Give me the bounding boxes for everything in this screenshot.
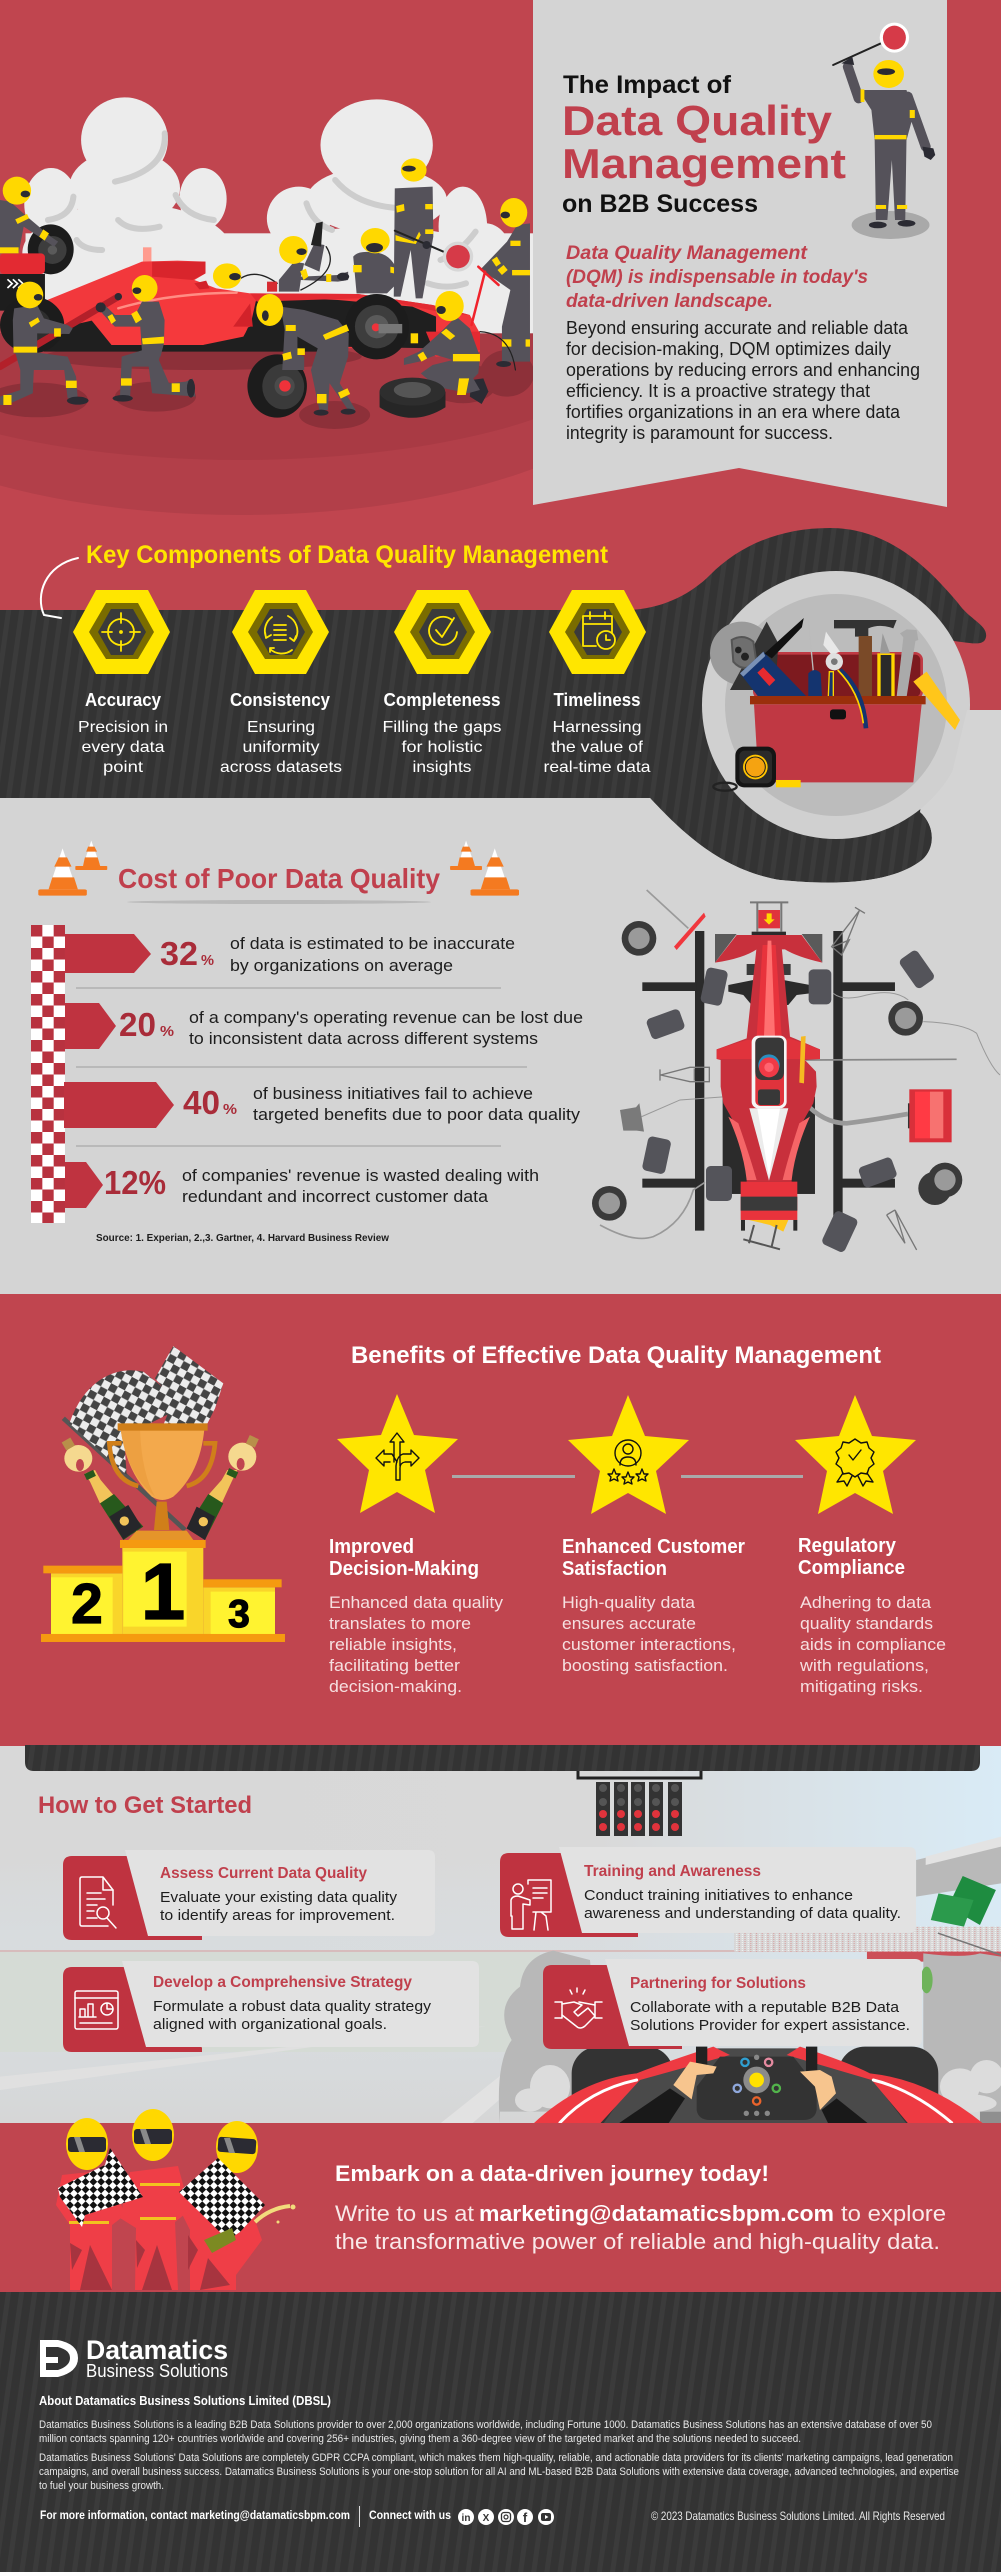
component: completeness: Filling the gaps <box>382 719 502 736</box>
crew member with tool <box>279 222 349 292</box>
call to action heading: Embark on a data-driven journey today! <box>335 2161 769 2186</box>
call to action text: the transformative power of reliable and high-quality data. <box>335 2229 940 2254</box>
about paragraphs: to fuel your business growth. <box>39 2480 164 2492</box>
benefit: decision-making: Improved <box>329 1536 414 1558</box>
intro paragraph: operations by reducing errors and enhancing <box>566 360 920 380</box>
podium numbers <box>71 1547 250 1636</box>
component: consistency: uniformity <box>242 739 320 756</box>
benefit: regulatory compliance <box>795 1395 946 1696</box>
component: completeness <box>382 590 502 776</box>
statistic 32%: of data is estimated to be inaccurate <box>230 934 515 953</box>
logo <box>40 2335 228 2381</box>
air guns and frames <box>660 907 917 1250</box>
crew member holding rear wheel <box>0 177 58 253</box>
checkered flags <box>58 2148 143 2227</box>
benefit: customer satisfaction: Enhanced Customer <box>562 1536 745 1558</box>
crew member at right with jack <box>472 198 530 367</box>
benefit: customer satisfaction: customer interactions, <box>562 1635 736 1654</box>
intro paragraph: Beyond ensuring accurate and reliable data <box>566 318 909 338</box>
crew member with lollipop sign <box>833 23 935 239</box>
component: accuracy: Precision in <box>78 719 168 736</box>
statistic 12%: 12% <box>104 1164 166 1201</box>
podium numbers: 2 <box>71 1572 103 1636</box>
card: develop a comprehensive strategy: Develop a Comprehensive Strategy <box>153 1974 412 1991</box>
statistic 32% <box>65 934 515 975</box>
trophy on podium illustration <box>41 1346 285 1642</box>
source note: Source: 1. Experian, 2.,3. Gartner, 4. Harvard Business Review <box>96 1232 390 1244</box>
card: assess current data quality: to identify areas for improvement. <box>160 1907 395 1924</box>
stacked tyre <box>380 378 445 418</box>
gray toolbox circle <box>702 571 970 839</box>
intro statement: data-driven landscape. <box>566 290 773 312</box>
smoke clouds <box>22 97 533 333</box>
icon: toolbox with tools <box>710 620 960 791</box>
component: consistency: across datasets <box>220 759 342 776</box>
starting lights <box>578 1771 701 1836</box>
component: completeness: for holistic <box>402 739 482 756</box>
rear wheel behind crew <box>28 224 74 274</box>
kneeling crew member with wrench <box>96 275 195 402</box>
benefit: decision-making: reliable insights, <box>329 1635 457 1654</box>
red wrench <box>0 297 118 367</box>
card: partnering for solutions: Solutions Provider for expert assistance. <box>630 2017 910 2034</box>
bending crew member <box>256 294 356 416</box>
title: Management <box>562 140 846 187</box>
driver arms and hands <box>618 2062 868 2124</box>
card: develop a comprehensive strategy: Formulate a robust data quality strategy <box>153 1998 432 2015</box>
icon: check circle <box>429 617 457 645</box>
statistic 12%: redundant and incorrect customer data <box>182 1187 489 1206</box>
social icons: f <box>523 2510 528 2525</box>
champagne bottle and spray <box>204 2204 296 2253</box>
statistic 32%: % <box>201 952 214 969</box>
checkered flags <box>63 1346 223 1530</box>
benefit: customer satisfaction: ensures accurate <box>562 1614 696 1633</box>
panel: title banner <box>533 0 947 507</box>
smoke <box>499 1951 1001 2124</box>
title: on B2B Success <box>562 190 758 218</box>
icon: target <box>102 613 140 651</box>
traffic cones left <box>38 841 107 896</box>
top dark bar <box>25 1745 980 1771</box>
loose wheels <box>592 921 962 1221</box>
racer helmets <box>66 2109 258 2173</box>
benefit: customer satisfaction: High-quality data <box>562 1593 696 1612</box>
benefit: regulatory compliance: aids in compliance <box>800 1635 946 1654</box>
heading: How to Get Started <box>38 1792 252 1819</box>
intro paragraph <box>566 318 920 443</box>
component: accuracy: point <box>103 759 144 776</box>
benefit: regulatory compliance: with regulations, <box>799 1656 929 1675</box>
statistic 32%: 32 <box>160 935 198 972</box>
title <box>562 71 846 218</box>
spare tyres <box>642 949 936 1253</box>
benefit: customer satisfaction: boosting satisfaction. <box>562 1656 728 1675</box>
card: partnering for solutions <box>543 1959 922 2049</box>
banner ribbon <box>533 0 947 507</box>
car tyres and suspension <box>700 964 831 1201</box>
lower gray background <box>0 710 1001 1294</box>
large tyre left <box>0 297 64 353</box>
card: training and awareness <box>500 1847 916 1937</box>
call to action text: marketing@datamaticsbpm.com <box>479 2201 834 2226</box>
icon: document with magnifier <box>80 1877 116 1928</box>
icon: cycle list <box>265 616 297 654</box>
icon: analytics dashboard <box>75 1991 118 2029</box>
heading: Key Components of Data Quality Management <box>86 541 609 569</box>
benefit: decision-making: decision-making. <box>329 1677 462 1696</box>
social icons: in <box>462 2513 470 2524</box>
connect with us label: Connect with us <box>369 2508 451 2522</box>
intro statement <box>566 242 868 312</box>
intro paragraph: efficiency. It is a proactive strategy that <box>566 381 870 401</box>
component: timeliness <box>544 590 651 776</box>
benefit: decision-making: Enhanced data quality <box>329 1593 504 1612</box>
benefit: regulatory compliance: mitigating risks. <box>800 1677 923 1696</box>
icon: handshake <box>555 1988 602 2028</box>
benefit: regulatory compliance: Compliance <box>798 1557 905 1579</box>
benefit: decision-making: facilitating better <box>329 1656 460 1675</box>
component: completeness: insights <box>412 759 472 776</box>
statistic 32%: by organizations on average <box>230 956 453 975</box>
intro statement: (DQM) is indispensable in today's <box>566 266 868 288</box>
card: assess current data quality: Assess Current Data Quality <box>160 1865 367 1882</box>
decorative curve <box>41 558 78 618</box>
benefit: regulatory compliance: Adhering to data <box>800 1593 932 1612</box>
traffic cones right <box>450 841 519 896</box>
component: consistency: Ensuring <box>247 719 315 736</box>
driver helmet <box>213 263 277 292</box>
component: timeliness: Harnessing <box>552 719 642 736</box>
intro paragraph: integrity is paramount for success. <box>566 423 833 443</box>
panel: call to action <box>0 2109 1001 2292</box>
call to action text: Write to us at <box>335 2201 475 2226</box>
page background: red upper area <box>0 0 1001 710</box>
car body <box>603 2048 907 2124</box>
panel: cost of poor data quality <box>31 841 1000 1253</box>
title: Data Quality <box>562 97 833 144</box>
component: timeliness: the value of <box>551 739 644 756</box>
component: completeness: Completeness <box>384 690 500 710</box>
benefit: regulatory compliance: Regulatory <box>798 1535 897 1557</box>
icon: calendar and clock <box>583 612 615 649</box>
floor shadows <box>0 343 534 429</box>
statistic 12% <box>65 1162 539 1208</box>
kneeling crew member left <box>0 282 89 405</box>
champagne bottles <box>62 1435 259 1540</box>
track floor ellipses <box>0 333 680 515</box>
racing car side view and crew <box>0 158 534 429</box>
benefit: customer satisfaction <box>562 1395 745 1675</box>
panel: how to get started <box>0 1745 1001 2124</box>
component: consistency <box>220 590 342 776</box>
car body <box>715 932 822 1232</box>
panel: hero pit-stop illustration <box>0 97 680 515</box>
loose wheel <box>247 354 307 418</box>
icon: customer with stars <box>608 1440 648 1484</box>
crew with checkered flags <box>56 2109 296 2290</box>
podium <box>41 1540 285 1642</box>
car body <box>44 247 480 357</box>
icon: presenter at board <box>511 1880 551 1930</box>
benefit: decision-making <box>329 1394 504 1696</box>
statistic 40%: % <box>223 1101 237 1118</box>
top-down race car pit box <box>592 890 1000 1253</box>
red equipment box <box>908 1089 952 1142</box>
component: consistency: Consistency <box>230 690 330 710</box>
podium numbers: 3 <box>228 1593 250 1636</box>
logo: Datamatics <box>86 2335 228 2365</box>
rear jack <box>743 1225 780 1249</box>
benefit: decision-making: Decision-Making <box>329 1558 479 1580</box>
trophy cup <box>109 1423 215 1540</box>
dark curved road band <box>0 528 986 883</box>
rear tyres <box>572 2047 938 2124</box>
card: develop a comprehensive strategy <box>63 1961 479 2052</box>
statistic 40% <box>64 1082 581 1128</box>
title: The Impact of <box>563 71 732 99</box>
connector lines <box>452 1475 803 1478</box>
card: assess current data quality <box>63 1850 435 1940</box>
statistic 20%: to inconsistent data across different systems <box>189 1029 538 1048</box>
statistic 20%: 20 <box>119 1006 156 1043</box>
card: partnering for solutions: Collaborate with a reputable B2B Data <box>630 1999 900 2016</box>
copyright: © 2023 Datamatics Business Solutions Limited. All Rights Reserved <box>651 2509 945 2523</box>
card: assess current data quality: Evaluate your existing data quality <box>160 1889 398 1906</box>
wires and hoses <box>600 993 1000 1238</box>
social icons <box>458 2509 554 2525</box>
intro statement: Data Quality Management <box>566 242 809 264</box>
front jack with arrow <box>750 902 788 932</box>
panel: key components <box>0 528 986 883</box>
about heading: About Datamatics Business Solutions Limited (DBSL) <box>39 2393 331 2408</box>
racer bodies <box>56 2166 262 2290</box>
statistic 20%: of a company's operating revenue can be lost due <box>189 1008 583 1027</box>
card: training and awareness: awareness and understanding of data quality. <box>584 1905 901 1922</box>
panel: benefits <box>0 1294 1001 1746</box>
statistic 40%: of business initiatives fail to achieve <box>253 1084 533 1103</box>
rear wing <box>0 253 45 311</box>
statistic 20%: % <box>160 1023 174 1040</box>
race track background <box>0 1746 1001 2124</box>
crouching crew member with wheel gun <box>404 291 515 404</box>
panel: footer <box>0 2292 1001 2572</box>
front wheel <box>345 294 409 359</box>
cockpit with steering wheel <box>499 1951 1001 2124</box>
card: training and awareness: Training and Awareness <box>584 1863 761 1880</box>
statistic 40%: 40 <box>183 1084 220 1121</box>
component: timeliness: Timeliness <box>554 690 640 710</box>
about paragraphs <box>39 2419 959 2492</box>
benefit: customer satisfaction: Satisfaction <box>562 1558 667 1580</box>
heading: Cost of Poor Data Quality <box>118 863 440 894</box>
checkered column <box>31 925 65 1223</box>
statistic 20% <box>65 1003 583 1049</box>
component: accuracy <box>73 590 170 776</box>
social icons: X <box>483 2513 490 2524</box>
intro paragraph: fortifies organizations in an era where data <box>566 402 901 422</box>
intro paragraph: for decision-making, DQM optimizes daily <box>566 339 891 359</box>
icon: diverging arrows <box>376 1433 419 1480</box>
component: timeliness: real-time data <box>544 759 651 776</box>
logo: Business Solutions <box>86 2361 228 2381</box>
component: accuracy: every data <box>82 739 165 756</box>
component: accuracy: Accuracy <box>85 690 161 710</box>
heading: Benefits of Effective Data Quality Management <box>351 1342 881 1369</box>
about paragraphs: million contacts spanning 120+ countries worldwide and covering 256+ industries, giving them a 360-degree view of the targeted market and the solutions needed to succeed. <box>39 2433 801 2445</box>
call to action text: to explore <box>841 2201 946 2226</box>
contact line: For more information, contact marketing@datamaticsbpm.com <box>40 2508 350 2522</box>
standing crew member with sign <box>394 158 473 298</box>
benefit: decision-making: translates to more <box>329 1614 471 1633</box>
card: develop a comprehensive strategy: aligned with organizational goals. <box>153 2016 387 2033</box>
call to action text <box>335 2201 946 2254</box>
podium numbers: 1 <box>141 1547 185 1636</box>
card: training and awareness: Conduct training initiatives to enhance <box>584 1887 853 1904</box>
card: partnering for solutions: Partnering for Solutions <box>630 1975 806 1992</box>
statistic 12%: of companies' revenue is wasted dealing with <box>182 1166 539 1185</box>
steering wheel <box>697 2047 817 2120</box>
crew member behind car <box>353 228 401 293</box>
icon: award badge <box>836 1439 874 1486</box>
benefit: regulatory compliance: quality standards <box>800 1614 933 1633</box>
statistic 40%: targeted benefits due to poor data quality <box>253 1105 581 1124</box>
